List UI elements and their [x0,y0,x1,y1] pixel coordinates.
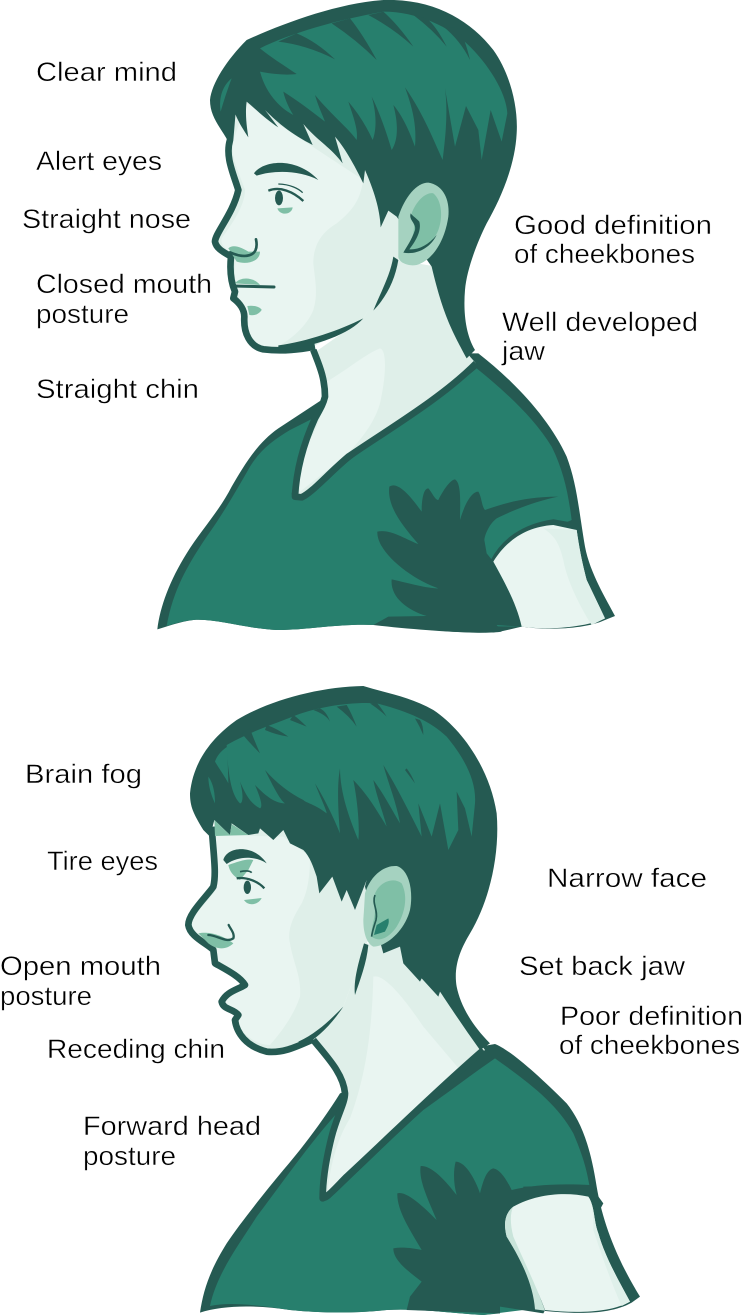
face outline [215,100,315,350]
figure: healthy profile with good posture [157,0,615,633]
label: open mouth posture [0,951,161,1011]
label: open mouth posture: posture [0,981,92,1011]
label: poor definition of cheekbones [559,1001,743,1060]
labels: top figure [22,57,712,404]
face highlight [192,835,310,1045]
arm [493,522,605,628]
label: forward head posture: Forward head [83,1111,261,1141]
face skin [188,827,383,1052]
label: alert eyes: Alert eyes [36,146,162,176]
label: closed mouth posture [36,269,212,329]
label: poor definition of cheekbones: Poor definition [560,1001,743,1031]
label: forward head posture [83,1111,261,1171]
shirt shadow patch [393,1162,603,1313]
label: open mouth posture: Open mouth [0,951,161,981]
nose [198,925,234,948]
ear [363,866,411,947]
label: set back jaw: Set back jaw [519,951,686,981]
shirt shadow patch [373,479,558,633]
arm [505,1194,630,1312]
label: straight chin: Straight chin [36,374,199,404]
label: jaw: Well developed [502,307,698,337]
forehead shade [214,820,248,836]
jaw line [278,318,363,351]
hair highlight [227,703,475,850]
label: poor definition of cheekbones: of cheekbones [559,1030,740,1060]
label: jaw: jaw [501,336,546,366]
label: jaw [501,307,698,366]
ear [398,183,449,265]
eyebrow [228,860,253,880]
face highlight [221,103,363,347]
hair silhouette [190,686,497,1050]
hair silhouette [210,0,517,358]
under eye mark [277,207,293,214]
label: receding chin: Receding chin [47,1034,225,1064]
shirt: bottom figure [200,1044,640,1315]
mouth [233,279,274,287]
eye [237,871,264,894]
head: bottom figure [188,686,497,1052]
label: clear mind: Clear mind [36,57,177,87]
under eye mark [244,898,262,904]
nose [228,239,260,263]
neck: bottom figure [312,943,485,1198]
head: top figure [210,0,517,358]
label: cheekbones: Good definition [514,210,712,240]
eyebrow [254,163,318,180]
hair streaks [278,12,470,60]
label: closed mouth posture: posture [36,299,129,329]
labels: bottom figure [0,759,743,1171]
hair highlight [260,12,507,160]
label: brain fog: Brain fog [25,759,142,789]
eye [268,184,303,205]
face skin [215,100,413,350]
chin mark [247,306,262,315]
face outline [188,827,313,1052]
label: tire eyes: Tire eyes [47,846,158,876]
hair streaks [242,703,423,783]
figure: poor posture profile [188,686,640,1315]
label: forward head posture: posture [83,1141,176,1171]
shirt: top figure [157,353,615,633]
neck: top figure [295,260,476,497]
label: closed mouth posture: Closed mouth [36,269,212,299]
jaw line [298,1007,343,1046]
label: cheekbones [514,210,712,269]
label: narrow face: Narrow face [547,863,707,893]
label: straight nose: Straight nose [22,204,191,234]
label: cheekbones: of cheekbones [514,239,695,269]
